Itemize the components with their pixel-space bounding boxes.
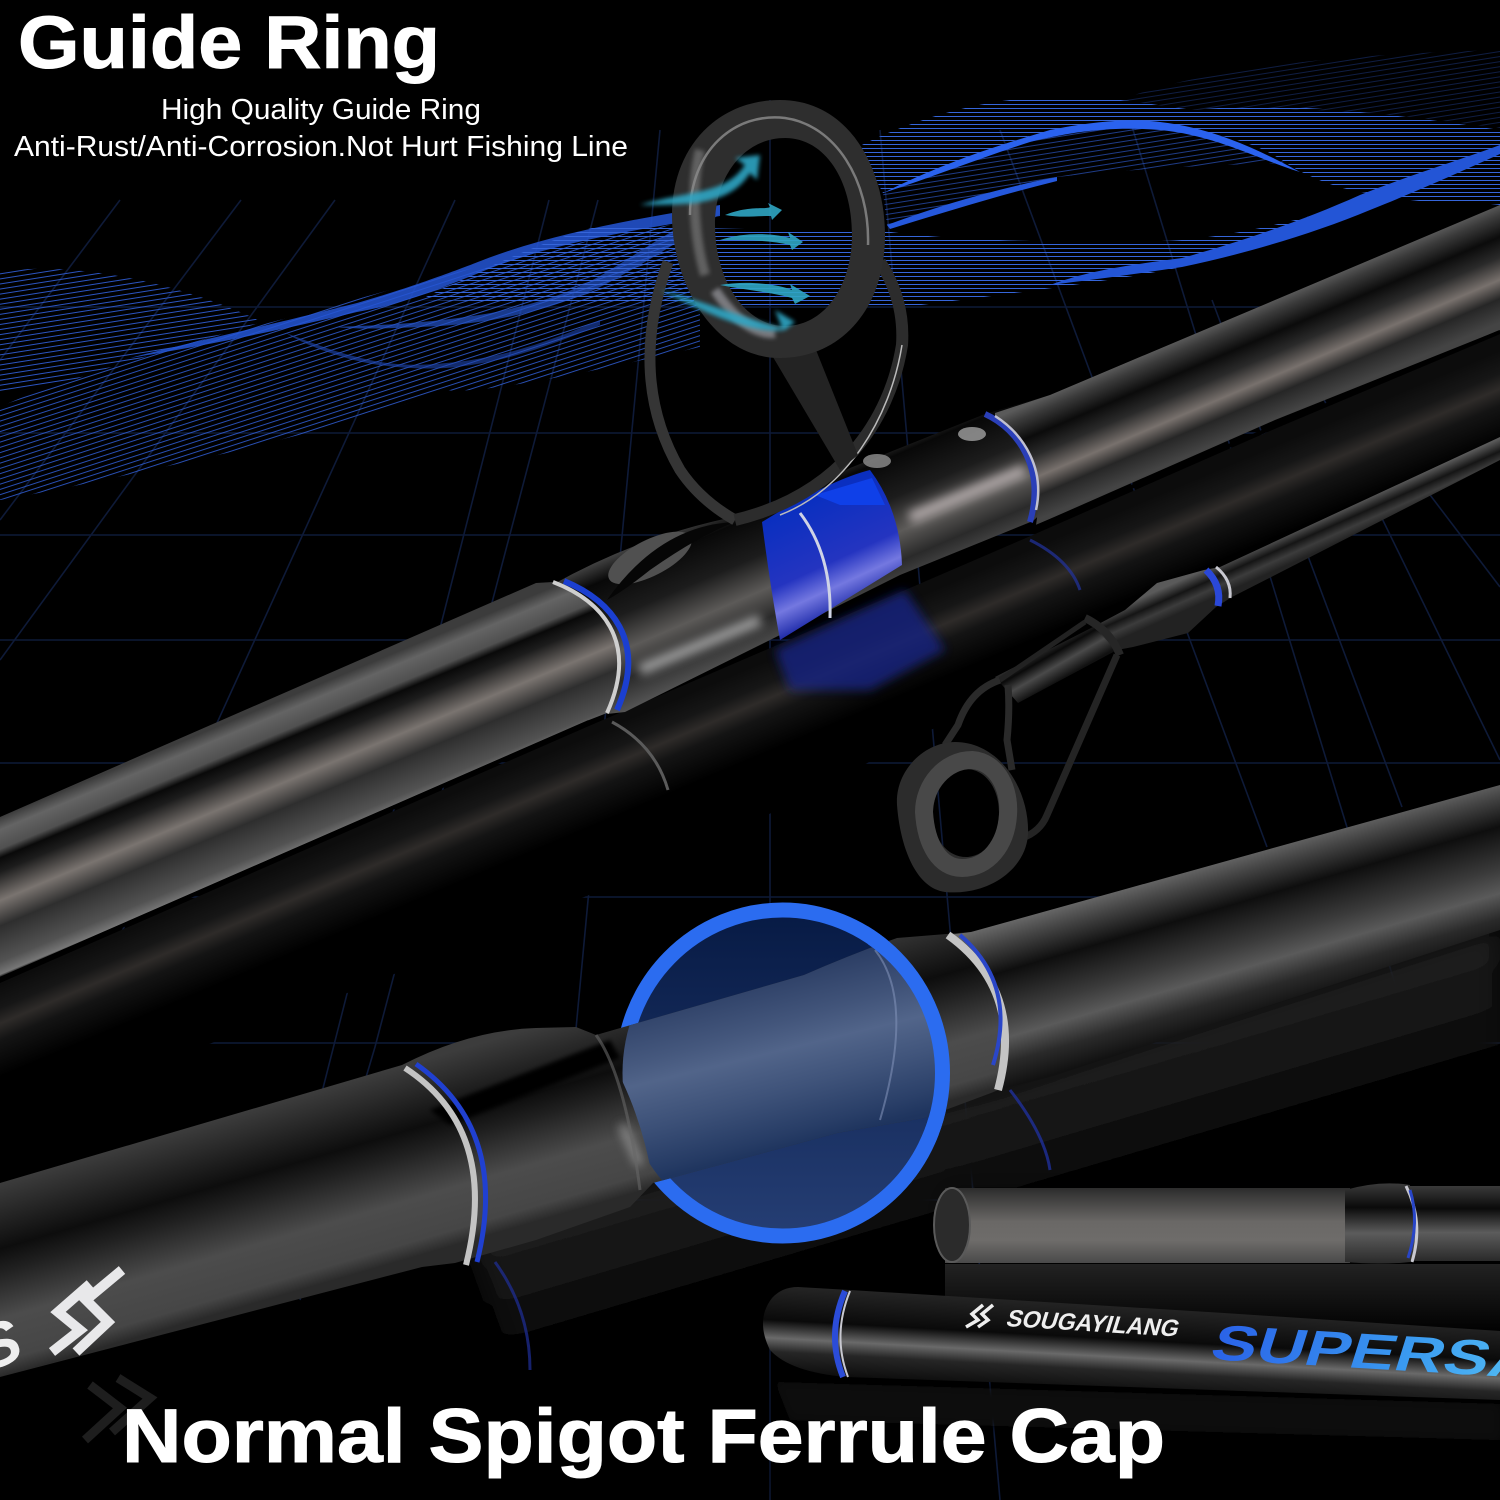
icon: guide ring with frame and air-flow arrows [640, 100, 902, 520]
reflection of logo [85, 1378, 150, 1440]
silver blue ring left [553, 581, 628, 713]
upper rod [0, 205, 1500, 979]
wave strands: upper right bright [883, 120, 1300, 193]
small rod with brand text [763, 1287, 1500, 1400]
guide centre leg [770, 340, 858, 470]
gloss highlights [601, 427, 986, 600]
guide frame wire right [735, 262, 902, 520]
reflected blue wrap [775, 590, 945, 690]
wave strands: left bright [130, 205, 720, 358]
reflection of cap [945, 1264, 1500, 1334]
brand name: SOUGAYILANG [1003, 1306, 1183, 1342]
blue thread wrap [762, 470, 902, 640]
subtitle line 1: High Quality Guide Ring [161, 94, 481, 126]
magnifier circle [622, 910, 942, 1236]
silver blue ring right [985, 414, 1038, 522]
matte cap piece [934, 1183, 1500, 1264]
guide ring [672, 100, 885, 358]
ferrule shoulder [596, 1035, 640, 1190]
wave band: upper right ribbons [858, 50, 1500, 285]
title: normal spigot ferrule cap: Normal Spigot Ferrule Cap [122, 1394, 1165, 1479]
silver blue ring lower left [405, 1064, 486, 1265]
flow arrows [640, 155, 810, 331]
small logo [966, 1305, 993, 1327]
wave band: left dim fan [0, 205, 720, 500]
reflection under lower rod [470, 925, 1500, 1500]
translucent magnifier tint on rod [622, 947, 935, 1180]
subtitle line 2: Anti-Rust/Anti-Corrosion.Not Hurt Fishing Line [14, 131, 628, 163]
magnifier right arc [868, 926, 950, 1220]
tip rod [995, 437, 1500, 703]
tip guide [897, 618, 1120, 892]
reflection under upper rod [0, 330, 1500, 1120]
wave band: centre lines behind ring [420, 147, 1500, 307]
silver blue ring upper right [948, 935, 1005, 1090]
brand logo on rod [0, 1270, 122, 1385]
reflection of small rod [775, 1382, 1500, 1440]
supersa wordmark: SUPERSA [1205, 1314, 1500, 1389]
title: guide ring: Guide Ring [18, 1, 440, 84]
lower rod with ferrule [0, 785, 1500, 1377]
guide frame wire left [650, 262, 735, 520]
